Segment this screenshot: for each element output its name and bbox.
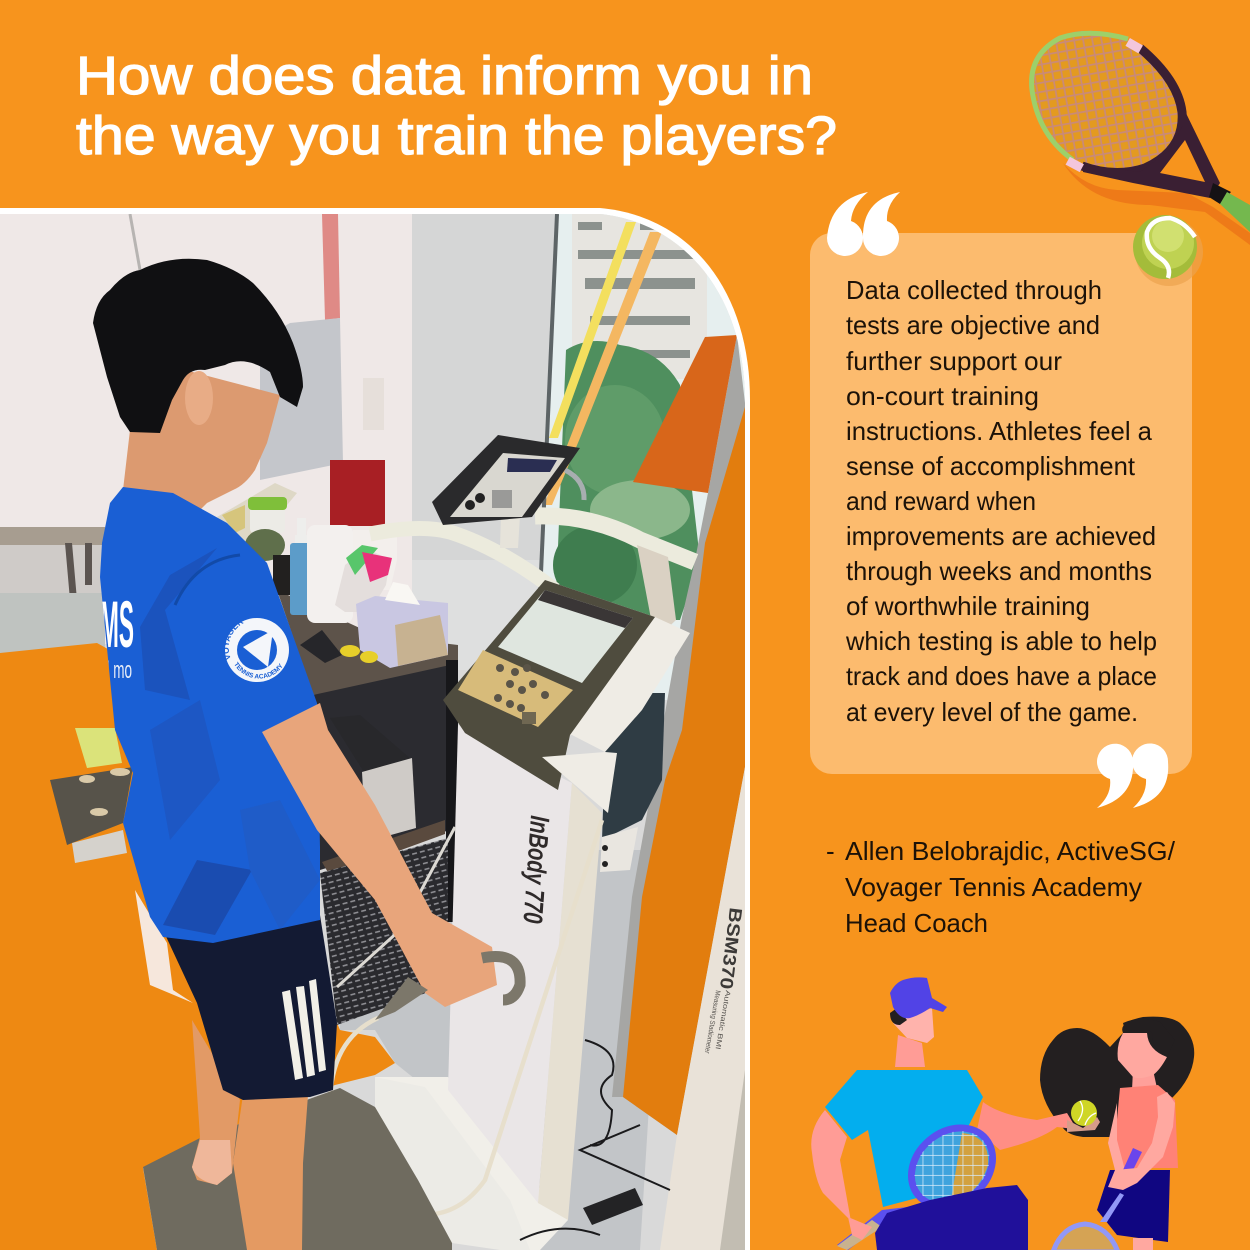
icon: closing quote mark	[1097, 743, 1168, 808]
shirt badge: Voyager Tennis Academy: VOYAGER	[225, 622, 244, 660]
shorts stripes	[282, 979, 326, 1080]
model label: InBody 770	[517, 815, 555, 924]
quote text: instructions. Athletes feel a	[846, 416, 1153, 446]
shirt: MS	[100, 587, 134, 661]
shirt sleeve seam	[175, 555, 240, 605]
hair	[93, 259, 303, 433]
title: the way you train the players?	[76, 106, 837, 166]
orange pillar	[612, 335, 746, 1250]
front leg	[233, 1095, 308, 1250]
photo frame	[0, 208, 750, 1250]
coach hair	[890, 1008, 907, 1025]
coach racket	[837, 1112, 1008, 1250]
ball in hand	[1067, 1100, 1100, 1132]
attribution	[826, 836, 1176, 938]
arm	[262, 703, 497, 1007]
title: How does data inform you in	[76, 46, 813, 106]
dark equipment behind scanner	[600, 693, 665, 872]
white cloth behind boy	[135, 890, 193, 1003]
coach right arm	[977, 1102, 1083, 1150]
photo panel: boy on body composition scanner	[0, 208, 750, 1250]
quote text: of worthwhile training	[846, 591, 1090, 621]
quote text: track and does have a place	[846, 661, 1157, 691]
quote text: which testing is able to help	[845, 626, 1157, 656]
quote text: further support our	[846, 346, 1062, 376]
scanner column	[448, 725, 572, 1203]
power adapter	[583, 1188, 643, 1225]
icon: tennis racket	[1002, 1, 1250, 245]
child racket	[1053, 1193, 1124, 1250]
icon: opening quote mark	[827, 192, 900, 256]
child shorts	[1097, 1170, 1170, 1242]
quote text: through weeks and months	[846, 556, 1152, 586]
quote card	[810, 192, 1192, 808]
quote text: sense of accomplishment	[846, 451, 1136, 481]
handrail arcs	[370, 528, 555, 590]
quote text: improvements are achieved	[846, 521, 1156, 551]
child face	[1118, 1033, 1167, 1078]
quote text	[845, 275, 1157, 727]
icon: tennis ball	[1133, 215, 1203, 286]
orange pillar: Measuring Stadiometer	[703, 990, 721, 1054]
illustration: coach and child with tennis rackets	[811, 977, 1194, 1250]
control head	[443, 580, 690, 790]
quote text: Data collected through	[846, 275, 1102, 305]
balance pads on floor	[50, 728, 133, 863]
attribution: Voyager Tennis Academy	[845, 872, 1142, 902]
room walls	[0, 214, 750, 1250]
upper console	[432, 435, 580, 525]
shorts	[163, 915, 337, 1100]
child right arm	[1108, 1092, 1175, 1190]
child's hair	[1040, 1017, 1194, 1137]
child	[1053, 1019, 1178, 1250]
boy	[93, 258, 526, 1250]
window with trees and reflections	[538, 214, 745, 700]
pillar label: BSM370	[716, 907, 746, 990]
white bracket	[542, 752, 617, 813]
coach face	[893, 1008, 934, 1043]
shirt badge: Voyager Tennis Academy	[225, 618, 289, 682]
quote text: on-court training	[846, 381, 1039, 411]
InBody scanner	[330, 435, 695, 1250]
quote text: and reward when	[846, 486, 1036, 516]
quote text: at every level of the game.	[846, 697, 1138, 727]
attribution: Allen Belobrajdic, ActiveSG/	[845, 836, 1176, 866]
coach shirt	[825, 1070, 985, 1207]
child racket handle	[1123, 1148, 1142, 1172]
coach neck	[895, 1035, 925, 1067]
coach hand	[848, 1217, 872, 1240]
footplate	[143, 1088, 452, 1250]
attribution: -	[826, 836, 835, 866]
shirt	[100, 487, 320, 943]
attribution: Head Coach	[845, 908, 988, 938]
shirt: d mo	[102, 657, 132, 684]
child vest	[1115, 1085, 1178, 1168]
cables	[330, 820, 602, 1215]
coach left arm	[811, 1110, 872, 1240]
quote text: tests are objective and	[846, 310, 1100, 340]
orange pillar: Automatic BMI	[714, 990, 731, 1050]
neck and face	[123, 370, 280, 510]
ear	[185, 371, 213, 425]
child fringe	[1123, 1019, 1175, 1057]
child neck	[1132, 1070, 1157, 1090]
shirt badge: Voyager Tennis Academy: TENNIS ACADEMY	[234, 662, 282, 679]
back leg	[192, 1020, 240, 1185]
grey floor	[340, 850, 665, 1250]
grip handle	[375, 957, 520, 1020]
orange floor	[0, 643, 395, 1250]
title	[76, 46, 837, 166]
side table with supplies	[217, 460, 458, 1025]
coach cap	[890, 977, 947, 1018]
child leg	[1133, 1238, 1153, 1250]
child left arm	[1108, 1103, 1125, 1170]
scanner base	[375, 1077, 568, 1250]
coach shorts	[875, 1185, 1028, 1250]
